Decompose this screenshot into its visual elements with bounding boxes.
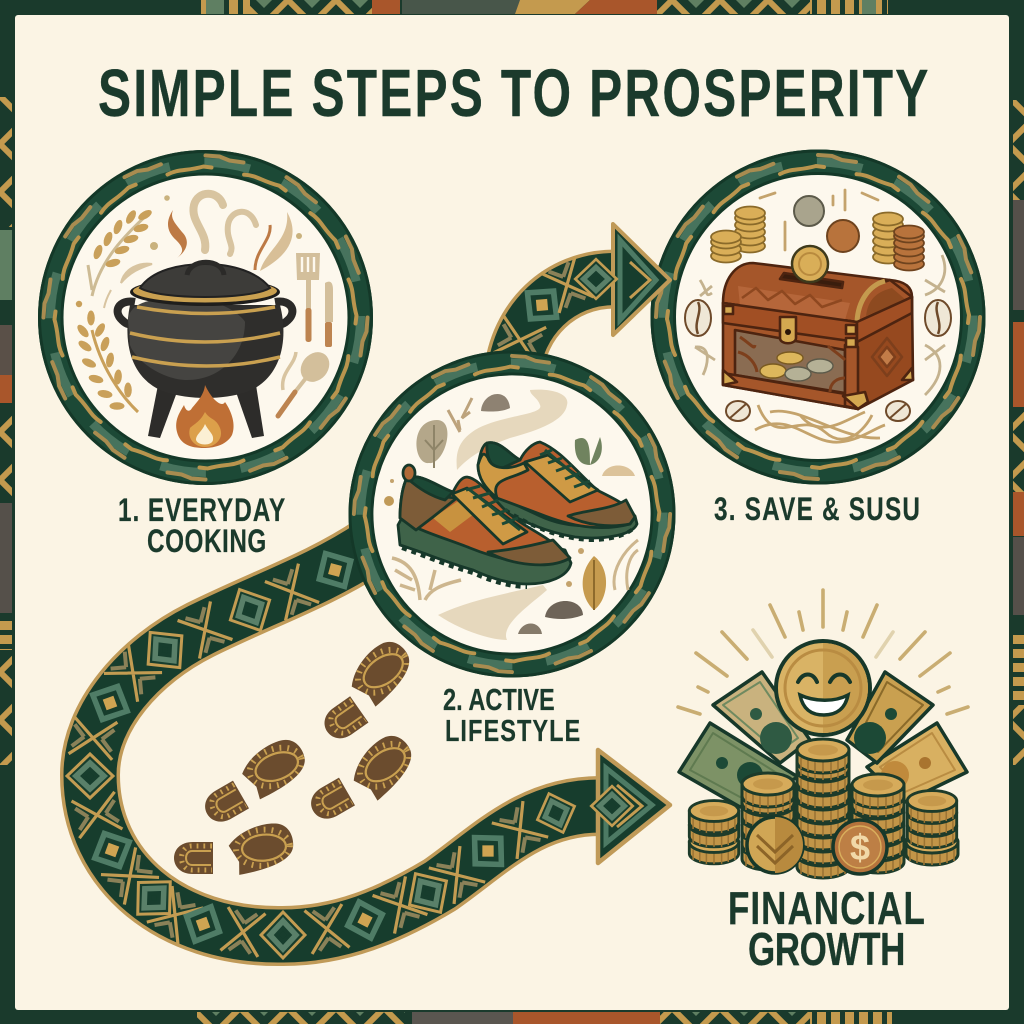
front coin: dollar [833,820,887,874]
financial growth illustration [678,590,968,878]
icon: back shoe [478,442,637,540]
label: active lifestyle: LIFESTYLE [445,713,580,748]
icon: falling coin [792,246,828,282]
icon: steam [76,194,302,308]
label: financial growth: FINANCIAL [728,882,925,934]
footprint: middle left [199,735,313,828]
sun rays [678,590,968,714]
label: active lifestyle [443,682,580,748]
smiling coin [776,641,870,735]
arrow: active lifestyle to saving [494,224,670,375]
arrow: winding path to financial growth [67,539,670,958]
label: financial growth [728,882,925,975]
icon: cooking pot [118,262,292,438]
label: save and susu: 3. SAVE & SUSU [714,492,920,528]
footprints [174,635,424,876]
footprint: bottom [174,822,296,876]
icon: utensils [278,253,335,416]
front coin: dollar: $ [850,827,870,868]
icon: wheat sprigs [75,208,153,412]
label: everyday cooking [118,493,285,560]
step 1 medallion: cooking pot [40,152,372,484]
step 3 medallion: treasure chest [652,151,984,483]
footprint: middle right [305,729,424,825]
label: active lifestyle: 2. ACTIVE [443,682,555,717]
front coin: arrow [747,817,803,873]
icon: cowrie shells and weave [685,190,951,442]
icon: trail and nature motifs [384,390,638,640]
money bills [679,672,967,807]
label: financial growth: GROWTH [748,923,905,975]
icon: front shoe [398,465,571,587]
coin stacks [689,739,958,878]
footprint: top [318,635,422,745]
step 2 medallion: walking shoes [350,352,674,676]
title: SIMPLE STEPS TO PROSPERITY [98,57,928,131]
icon: fire [176,385,234,448]
icon: treasure chest [723,263,913,409]
label: everyday cooking: COOKING [147,524,266,560]
icon: coin stacks [711,196,924,270]
label: everyday cooking: 1. EVERYDAY [118,493,285,529]
